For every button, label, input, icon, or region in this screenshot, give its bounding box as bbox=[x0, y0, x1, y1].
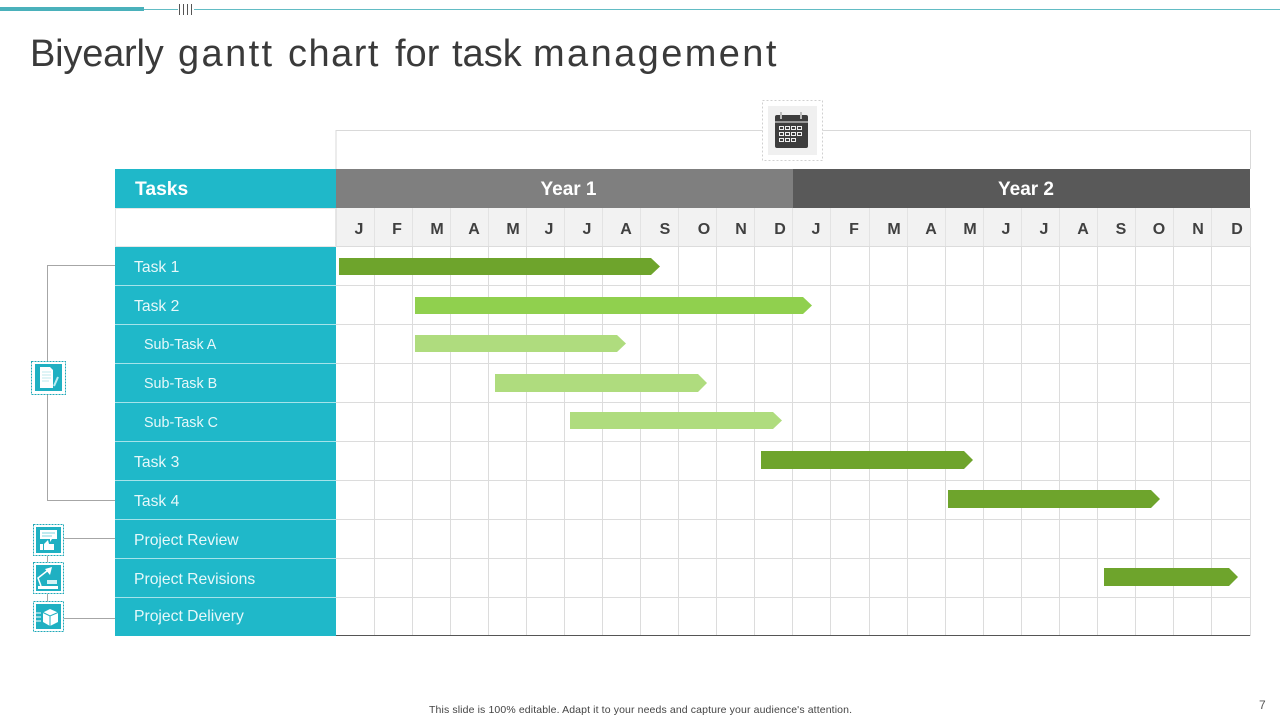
page number: 7 bbox=[1259, 698, 1266, 712]
month header row: J bbox=[1002, 221, 1010, 238]
task label column bbox=[115, 247, 336, 636]
month header row: O bbox=[698, 221, 710, 238]
task label column: Task 1 bbox=[134, 259, 179, 276]
empty cell under Tasks bbox=[116, 208, 336, 246]
icon: calendar bbox=[762, 100, 822, 160]
bar: Sub-Task B bbox=[495, 374, 707, 392]
month header row: M bbox=[430, 221, 444, 238]
task label column: Project Revisions bbox=[134, 571, 255, 588]
title: management bbox=[533, 33, 779, 75]
header: Year 2 bbox=[793, 169, 1250, 208]
top decorative rule bbox=[0, 4, 1280, 15]
month header row: J bbox=[1040, 221, 1048, 238]
gantt grid bbox=[336, 246, 1250, 636]
month header row: F bbox=[849, 221, 859, 238]
task label column: Sub-Task B bbox=[144, 376, 217, 392]
month header row: F bbox=[392, 221, 402, 238]
task label column: Task 2 bbox=[134, 298, 179, 315]
task label column: Project Review bbox=[134, 532, 239, 549]
title: gantt bbox=[178, 33, 275, 75]
icon: thumbs up review bbox=[34, 524, 64, 556]
task label column: Sub-Task A bbox=[144, 337, 217, 353]
month header row: S bbox=[660, 221, 671, 238]
bar: Sub-Task C bbox=[570, 412, 782, 429]
task label column: Project Delivery bbox=[134, 608, 244, 625]
header: Year 1 bbox=[336, 169, 793, 208]
month header row: N bbox=[735, 221, 747, 238]
month header row: A bbox=[1077, 221, 1089, 238]
task label column: Task 3 bbox=[134, 454, 180, 471]
header: Tasks bbox=[115, 169, 336, 208]
bar: Project Revisions bbox=[1104, 568, 1238, 586]
footer note: This slide is 100% editable. Adapt it to your needs and capture your audience's attention. bbox=[429, 704, 852, 716]
icon: document bbox=[32, 362, 66, 394]
icon: delivery box bbox=[34, 602, 64, 632]
month header row: D bbox=[1231, 221, 1243, 238]
month header row: J bbox=[583, 221, 591, 238]
month header row: D bbox=[774, 221, 786, 238]
task label column: Sub-Task C bbox=[144, 415, 218, 431]
bar: Task 3 bbox=[761, 451, 973, 469]
header: Year 2: Year 2 bbox=[998, 179, 1054, 200]
header: Tasks: Tasks bbox=[135, 179, 188, 200]
bar: Sub-Task A bbox=[415, 335, 626, 352]
month header row: M bbox=[887, 221, 901, 238]
month header row: A bbox=[925, 221, 937, 238]
connector lines bbox=[48, 266, 115, 618]
icon: desk lamp bbox=[34, 562, 64, 594]
month header row: M bbox=[506, 221, 520, 238]
month header row: J bbox=[812, 221, 820, 238]
bar: Task 2 bbox=[415, 297, 812, 314]
month header row: J bbox=[545, 221, 553, 238]
task label column: Task 4 bbox=[134, 493, 180, 510]
bar: Task 1 bbox=[339, 258, 660, 275]
month header row: A bbox=[620, 221, 632, 238]
title: Biyearly bbox=[30, 33, 164, 75]
month header row: N bbox=[1192, 221, 1204, 238]
title: for bbox=[395, 33, 440, 75]
title: chart bbox=[288, 33, 380, 75]
month header row: O bbox=[1153, 221, 1165, 238]
month header row: A bbox=[468, 221, 480, 238]
month header row: M bbox=[963, 221, 977, 238]
month header row: J bbox=[355, 221, 363, 238]
month header row bbox=[336, 208, 1250, 247]
timeline frame bbox=[336, 130, 1250, 169]
bar: Task 4 bbox=[948, 490, 1160, 508]
month header row: S bbox=[1116, 221, 1127, 238]
header: Year 1: Year 1 bbox=[540, 179, 597, 200]
title: task bbox=[452, 33, 523, 75]
